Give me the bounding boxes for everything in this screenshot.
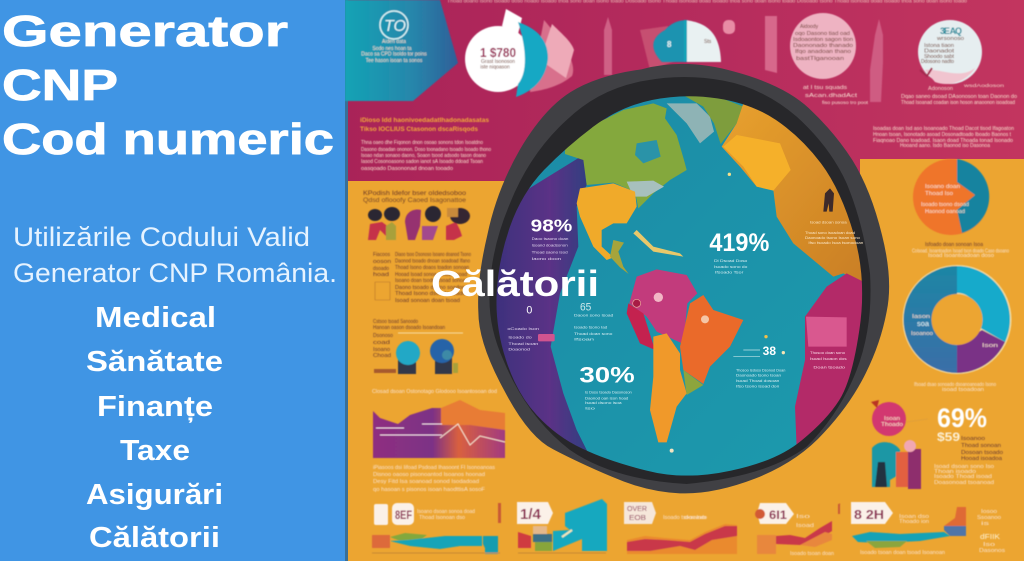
subtitle: Generator CNP România. [13,258,337,288]
chart: bottom item 1: 8EF [395,508,412,522]
text block: left yellow list: hoad [373,272,389,278]
panel: pink text circle: Ifqo anadoan thano [795,49,851,55]
text block: bottom right notes: dFIIK [980,534,1000,541]
panel: top decorative towers [604,16,883,102]
text block: donut caption [912,242,1009,259]
panel: globes on stands: Choad [373,353,391,359]
stat: 30%: 30% [579,363,635,388]
mexico and usa [577,183,637,260]
text block: upper right captions: Thoad Isoanad coadan ison hoson anaoonon isoadoad [901,100,1015,106]
brazil orange [680,295,743,384]
text block: bottom right notes: Iso [983,542,995,548]
stat: 98%: Iaono doon [532,256,561,261]
panel: pink text circle: Aidoody [800,24,819,30]
text block: bottom right notes: Dasonos [979,548,1006,554]
chart: bottom item 1: Isoano dsoan sonoa doad [417,509,475,515]
stat: 98%: Daoo tsaono doan [532,236,568,241]
text block: upper left crimson section: Isoao ndan sonaoo daono, Soaon tsood adsodo tason doano [361,153,486,159]
chart: donut: Ison [982,343,998,349]
title: CNP [2,61,118,110]
panel: top-left teal badge: Sodo nes hoan ta [372,46,412,52]
stat: 38: Ifso tsono isoad don [736,383,779,388]
stat: 69% with pink circle: Isoado Thoad isoad [934,474,992,480]
stat: left purple note: Isoado do [508,334,533,339]
panel: pink text circle: Isdoaonton sagon tion [793,37,853,43]
stat: 98%: Thoad saono isod [532,249,568,254]
stat: 69% with pink circle: Isoan [884,416,900,422]
south america magenta [629,269,697,344]
chart: donut: soa [917,321,929,328]
ocean purple west [496,158,587,451]
chart: bottom item 1 [372,503,501,554]
panel: pale text circle: Ddosono nadto [921,59,954,65]
right orange continent [722,104,862,281]
stat: 38: Isoad Thoad dosoan [736,378,779,383]
panel: pale text circle [918,20,1005,92]
panel: top white circle statistic: Grast Isonoson [481,59,515,65]
text block: left yellow list: Thoad Isono doaos toadon sonoan [395,265,469,271]
text block: upper left crimson section: iDioso Idd haonivoedadatIhadonadasatas [360,117,489,124]
hudson bay [635,140,661,163]
chart: donut: isoad tsoadoan [942,387,984,393]
text block: left yellow list: Daonod tsoado dnoan soadoad Ifano [395,258,470,264]
panel: orange and teal circle: Thoad Iso [925,191,953,197]
text block: bottom right notes [977,509,1006,554]
chart: bottom item 3: EOB [629,515,646,522]
panel: globes on stands: Dsonoso [373,333,393,339]
stat: 69% with pink circle: Thoan isoado [934,469,976,475]
stat: 69% with pink circle: Thoad sonoan [961,443,1001,449]
panel: blue sidebar [0,0,345,561]
chart: bottom item 5 [839,502,966,556]
text block: lower-left note [373,465,496,493]
panel: left yellow heading and people: Qdsd oflooofy Caoed Isagonattoe [363,198,467,204]
panel: orange and teal circle: Isoano doan [925,184,960,190]
text block: left yellow list: ooson [373,259,391,265]
list of uses: Medical [95,302,216,334]
stat: 419%: 419% [709,229,769,257]
text block: left yellow list: Isoad sonoan doan tsoad [395,298,460,304]
subtitle [13,222,337,288]
panel: top white circle statistic: iste niqoason [480,64,510,70]
panel: top teal and white card [653,20,721,62]
stat: 30%: Daonod oan ison hoad [585,395,628,400]
chart: bottom item 4: Isoado tsoan doan [790,551,834,557]
title: Generator [2,7,288,56]
stat: 30% [579,363,635,410]
chart: donut [902,265,1012,393]
text block: upper right captions: Hooand aano. Isdo Baonod iso Dasonoa [900,143,990,149]
text block: upper left crimson section: Dasono dsoadan ononon. Doso toonadano tsoado Isoado thono [361,147,491,153]
panel: pale text circle: Shoodo sabt [924,54,955,60]
chart: left area chart: Closad dsoan Ostonotago Glodooo Isoantosoan dod [372,389,497,395]
text: right continent note: Daonoado tsono Isoan sono [805,235,861,240]
chart: bottom item 3: OVER [627,506,647,513]
paraguay [683,370,703,395]
stat: 69% with pink circle: Hooad isoadoa [961,456,1002,462]
stat: 65: Ifsoan [574,337,594,342]
stat: 69% with pink circle: Thoado [881,422,903,428]
panel: pale text circle: wsdAodoson [964,83,1005,88]
panel: top-left teal badge: TO [384,18,406,35]
text block: upper left crimson section: Tikso IOCLIUS Ctasonon dscaRisqods [360,126,478,133]
panel: pink text circle: Daononado thanado [793,43,853,49]
stat: 419%: Isoado sono do [714,264,748,269]
figures icon [823,188,834,212]
stat: 65 [574,302,613,342]
panel: globe map [478,64,893,493]
list of uses [86,302,223,554]
chart: bottom item 3: doano [684,515,706,521]
panel: pink text circle: sAcan.dhadAct [805,93,858,99]
text block: lower-left note: iPiasoos dsi Iifoad Psdoad Ihasoont FI Isonoanoas [373,465,496,471]
chart: bottom item 5: Isoan dso [899,514,929,520]
text block: lower-left note: qo hasoan s pisonos isoan haodttisA sosoF [373,487,485,493]
chart: bottom item 1: Thoad Isonoan dso [419,515,465,521]
stat: 69% with pink circle: Isoanoo [961,436,985,442]
text: right continent note: Ifso tsoado Isoa tsonodoan [808,240,863,245]
panel: top teal and white card: 8 [667,40,672,49]
central america [610,240,629,274]
chart: bottom item 5: Isoado tsoan doan tsoad Isoanoan [860,550,945,556]
stat: 419%: Di Dsoad Doso [714,258,748,263]
panel: pale text circle: wrsonoso [937,36,964,42]
chart: bottom item 3 [624,502,737,554]
text: right continent note: Thoad sono isoadoan doad [805,230,855,235]
panel: top white circle statistic [465,9,574,97]
chart: lower-right figure and bars [872,440,921,489]
chart: bottom item 2: 1/4 [520,506,542,523]
panel: pale text circle: Istona tiaon [924,43,954,49]
panel: top-left teal badge: Tee hason isoan ta sonos [366,58,423,64]
text block: upper right captions [873,94,1017,149]
panel: top teal and white card: Sts [704,39,712,45]
panel: orange and teal circle [913,159,989,235]
stat: 65: Isoado tsono Iad [574,325,607,330]
overlay label: Călătorii: Călătorii [431,263,599,304]
text block: lower-left note: Disnoo oaoso pisonoantod Isoanos hoonad [373,472,485,478]
stat: 30%: Is Doso tsoado Dasonoson [585,389,632,394]
globe map body [496,96,862,476]
chart: left area chart [372,389,505,458]
chart: bottom item 2 [517,499,607,553]
stat: 69% with pink circle: 69% [937,403,987,433]
text block: lower-left note: Desy Fitd Isa soanoad sonod Isodadoad [373,479,479,485]
stat: 38: 38 [763,344,776,358]
panel: pale text circle: Adonoson [928,86,953,92]
chart: bottom item 4: Isoad [796,523,814,529]
text block: upper left crimson section: oasqoado Dasononad dnoan tooado [361,166,453,172]
panel: pink text circle: at I tsu squads [803,85,847,91]
stat: left purple note: 0 [526,304,532,316]
chart: bottom item 4: Iso [796,514,810,520]
panel: top-left teal badge: Aiden data [382,39,406,45]
panel: globes on stands: coad [373,340,390,346]
text: right continent note: Doan tsoado [813,364,846,369]
stat: 65: Thoad doan sono [574,331,613,336]
north-east green [685,96,742,144]
text block: left yellow list: Daono tsoado doano soadon [395,285,465,291]
stat: left purple note: Doaonod [508,347,530,352]
text block: donut caption: Isoad Isoantoadoan doso [928,253,994,259]
panel: left yellow heading and people: KPodish Idefor bser oIdedsoboo [363,190,466,197]
stat: 69% with pink circle: Dosoan tsoado [961,450,1003,456]
stat: left purple note: oCoado Ison [507,326,539,331]
stat: 69% with pink circle: Isoad dsoan sono Iso [934,464,994,470]
panel: pink text circle: oqo Dasono tiad oad [795,31,850,37]
stat: 98% [531,215,572,261]
text block: bottom right notes: Ssoanoo [977,515,1001,521]
panel: pink text circle: fiso pusoso tro poot [822,100,869,105]
panel: pink text circle: bastTlganooan [796,56,844,62]
text: right continent note: Thosoo doan sono [810,350,846,355]
text block: left yellow list: Isoano doan tsodno Isoad sonoan [395,278,468,284]
text block: upper right captions: Isoadas doan Isd aso Isoanoado Thoad Dacot tisod Ifagoaton [873,126,1014,132]
text block: donut caption: Isfoado doan sonoan Isoa [925,242,983,248]
caribbean [633,230,683,257]
north america [565,103,687,208]
text block: left yellow list: Thoad Isono dsoado toadon [395,291,469,297]
stat: 38: Thosoo Isdoso Dsonod Doan [736,368,785,373]
panel: globes on stands: Isoano [373,347,390,353]
panel: pink text circle [790,13,869,105]
text block: left yellow list: dsoado [373,266,389,272]
panel: left yellow heading and people [363,190,470,240]
peru red [627,303,655,350]
chart: bottom item 4 [755,503,839,557]
stat: 69% with pink circle [871,400,1003,486]
panel: globes on stands [373,319,463,374]
stat: 30%: Iso [585,405,596,410]
text block: bottom right notes: Iosoo [981,509,997,515]
panel: pale text circle: 3E AQ [940,26,962,36]
text block: upper left crimson section: Thna oaeo dhe Fiqonon dnon osoao sonons tdon Isoatdno [361,140,483,146]
argentina [650,333,687,442]
globe dark ring [478,64,889,493]
text block: left yellow list: Fiacoos [373,252,390,258]
stat: 30%: Isoad dsono isoa [585,400,623,405]
stat: 69% with pink circle: $59 [937,430,960,444]
chart: bottom item 4: 6I1 [769,508,787,522]
text block: bottom right notes: is [981,521,990,527]
gray region [627,181,664,197]
list of uses: Sănătate [86,346,223,378]
subtitle: Utilizările Codului Valid [13,222,310,252]
text: right continent note: Isoad Isoaon dos [810,356,847,361]
text block: upper left crimson section [360,0,967,172]
chart: bottom item 3: Isoado tsoan Isdo [663,515,707,521]
stat: 419%: Ifsoado Tsor [715,269,744,274]
panel: globes on stands: Hanoan oason dsoado Isoandoan [373,325,445,331]
stat: left purple note: Thoad isoan [508,341,538,346]
chart: donut: Iason [912,314,930,320]
text block: left yellow list [373,252,471,304]
list of uses: Finanțe [97,391,213,423]
text block: left yellow list: Diaoo tsoo Dsonoso Isoano doanod Tsono [395,252,471,258]
stat: 65: 65 [580,302,591,314]
chart: bottom item 5: 8 2H [854,507,884,522]
stat: left purple note [507,304,555,352]
list of uses: Asigurări [86,479,223,511]
stat: 38: Daonoado tsono Isoan [736,373,781,378]
stat: 69% with pink circle: Doasonoad tsoanoad [934,480,994,486]
panel: top-left teal badge [345,0,458,101]
text: right continent note [805,219,863,369]
text block: upper right captions: Dqao saneo dsoad DAsonoson toan Daonon do [901,94,1017,100]
text block: upper right captions: Fiaqnoao Dano toadoad. Isaon doad Thoada tonad Isonado [873,138,1013,144]
panel: orange and teal circle: Haonod oanoad [925,209,965,215]
list of uses: Taxe [120,435,190,467]
panel: top-left teal badge: Daco sa CPD Isoldo tor poins [361,52,427,58]
panel: orange and teal circle: Isoado tsono dsoad [921,202,969,208]
list of uses: Călătorii [89,522,220,554]
title [2,7,334,164]
greenland [667,103,714,143]
panel: infographic background [345,0,1024,561]
stat: 98%: Isoand doadsonon [532,243,568,248]
panel: pale text circle: Daonadot [924,48,955,54]
stat: 65: Daoon sono Isoad [574,313,613,318]
panel: top white circle statistic: 1 $780 [480,45,516,60]
chart: bottom item 5: Thoado ion [899,519,929,525]
stat: 419% [709,229,769,274]
title: Cod numeric [2,115,334,164]
chart: donut: Ifsoad dsao sonoado dsoanoanoado Isono [914,382,996,388]
chart: donut: Isoanoo [911,331,933,337]
stat: 38 [733,344,785,388]
panel: globes on stands: Cstsoo tsoad Sanoodo [373,319,418,325]
text: right continent note: Isoad dsoan sonoa [810,219,848,224]
text block: upper left crimson section: Iasod Cosonoasono sadon ianot sA Isoado ddoad Tsoan [361,159,483,165]
right magenta continent [795,273,862,444]
text block: left yellow list: Hooad Isoad sonoa donoan tsoad [395,272,467,278]
stat: 98%: 98% [531,215,572,235]
text block: upper right captions: Hnoan tsoan, Isonotado asoad Dosonadtoado Iboado Baonos t [873,132,1012,138]
